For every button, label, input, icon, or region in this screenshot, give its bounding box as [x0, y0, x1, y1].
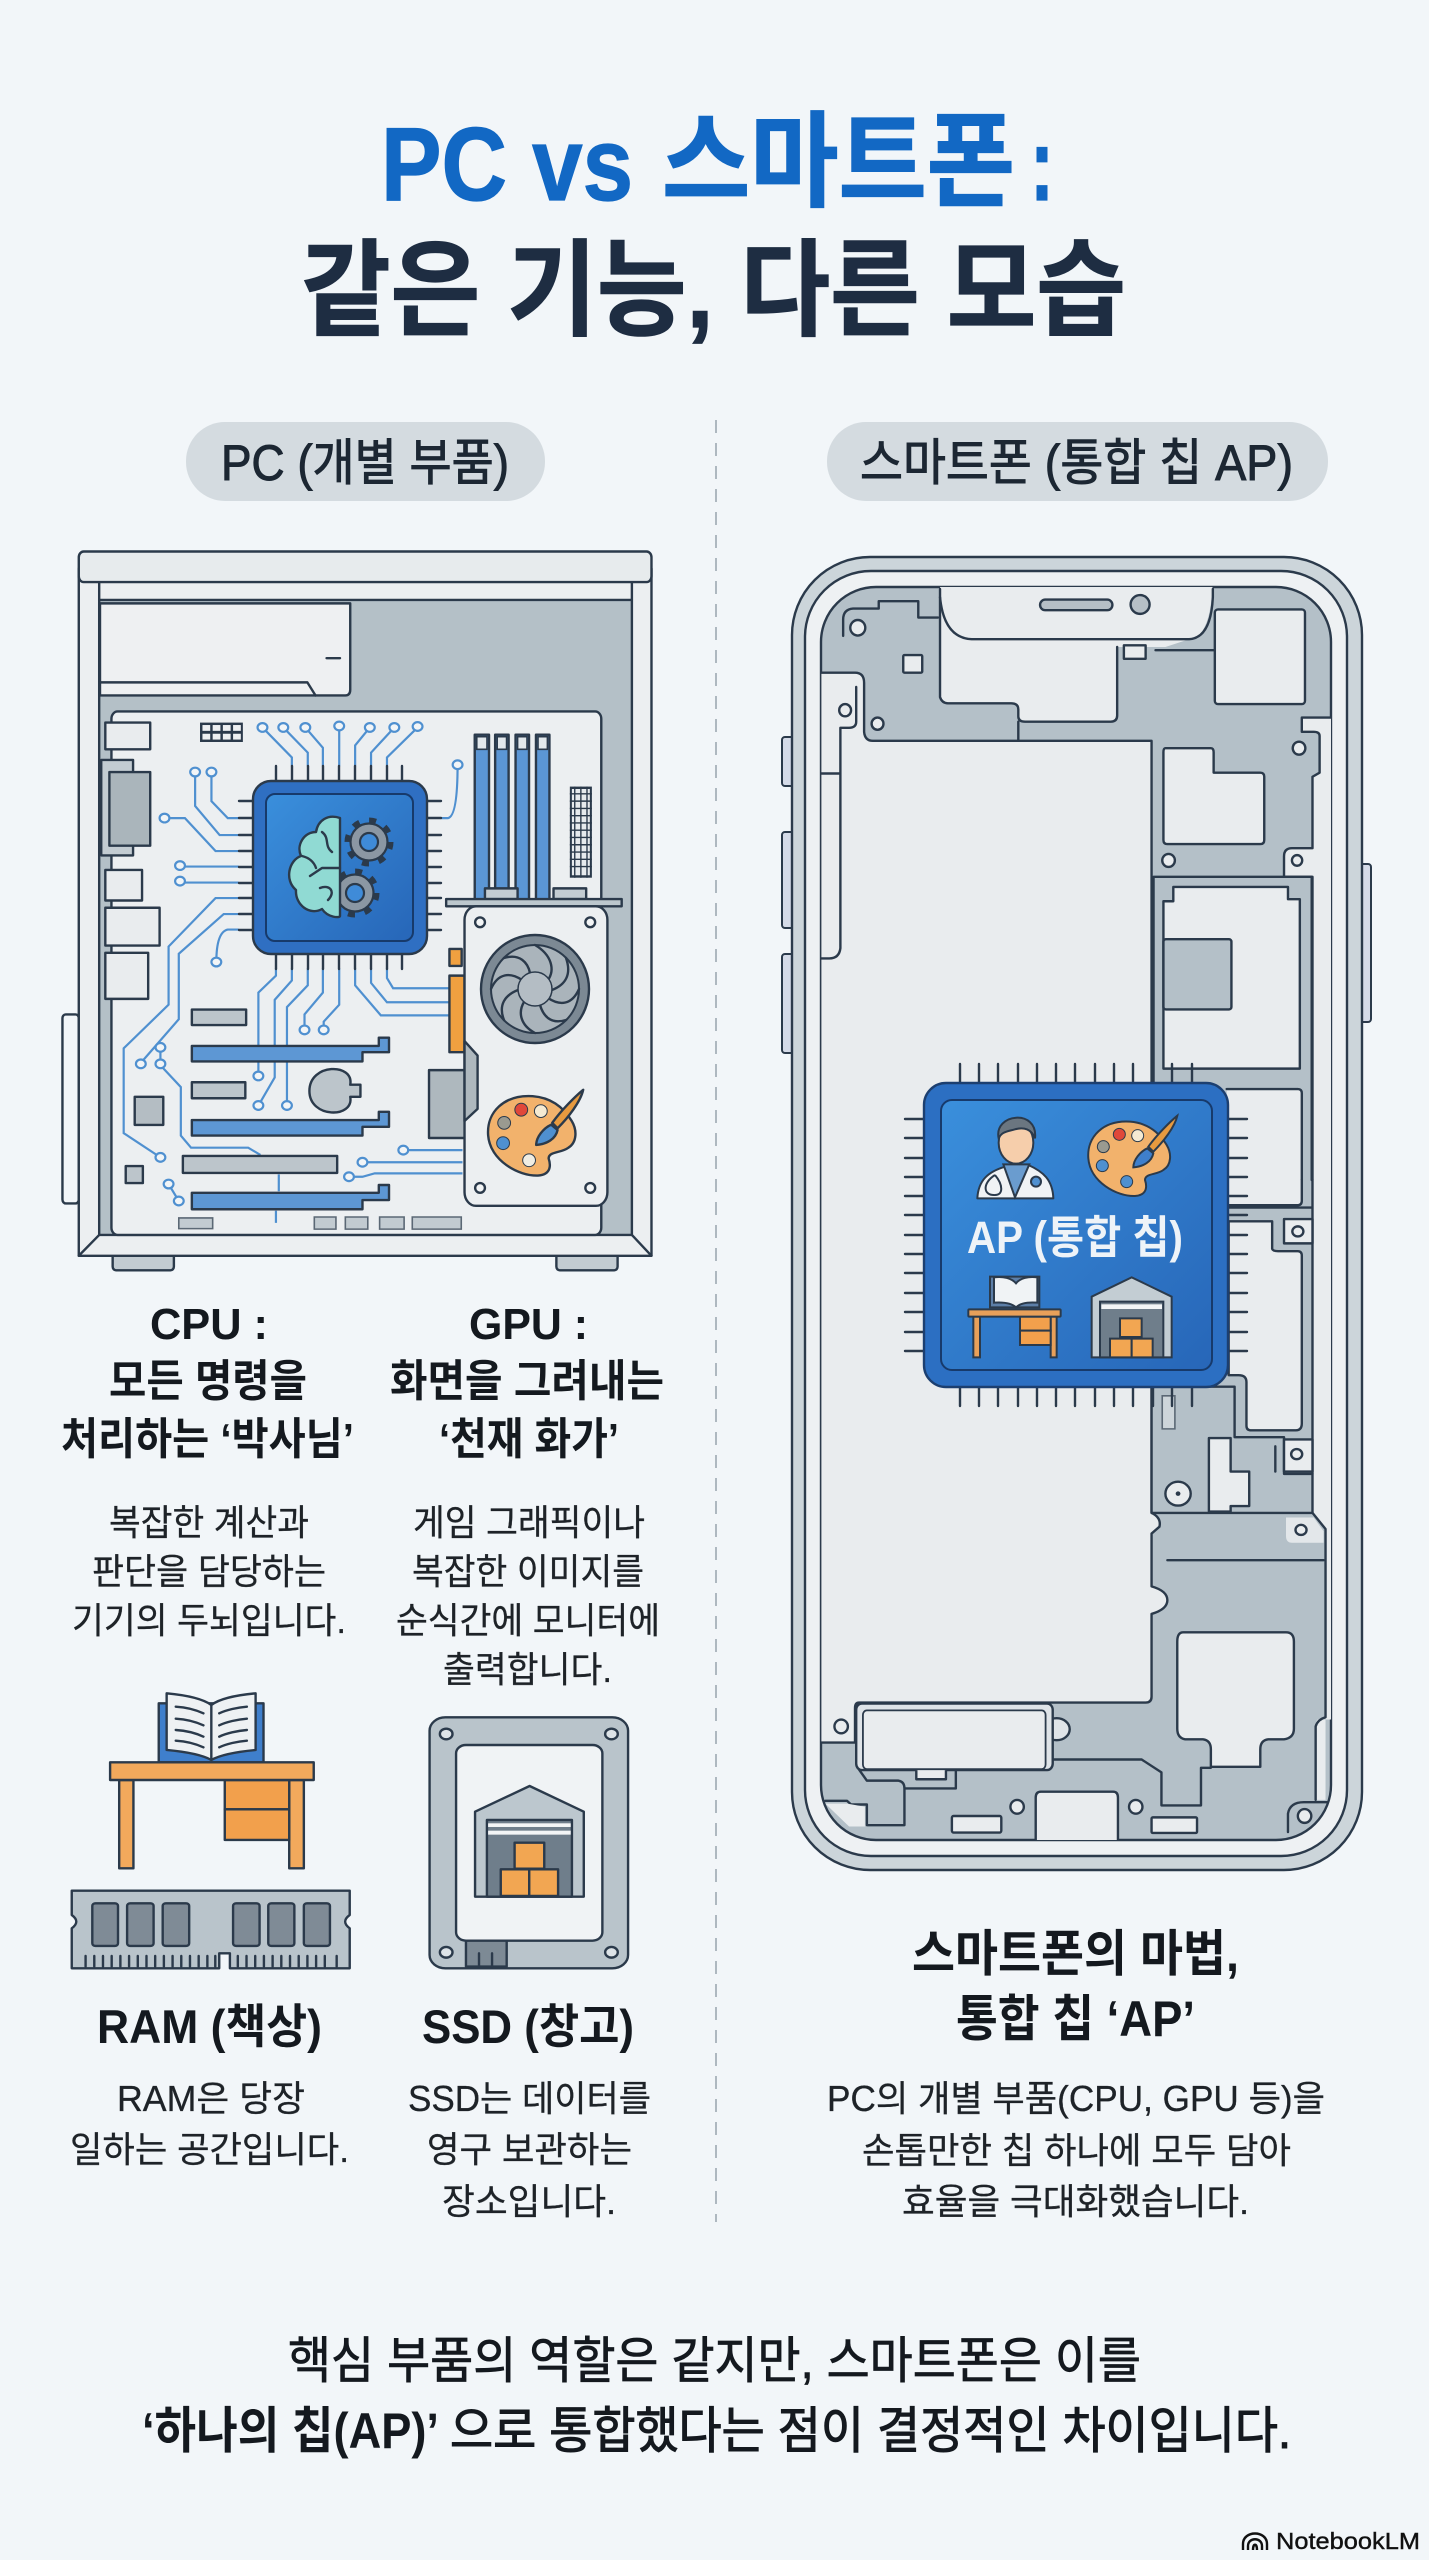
power supply: [100, 603, 350, 695]
CPU pins: [239, 766, 441, 969]
RAM sticks: [475, 735, 549, 900]
battery lower: [821, 1180, 1167, 1743]
RAM description: [70, 2000, 349, 2170]
icon: doctor: [977, 1118, 1053, 1198]
conclusion text: [142, 2333, 1291, 2459]
GPU description: 복잡한 이미지를: [412, 1551, 644, 1592]
title: PC vs: [381, 107, 633, 223]
RAM description: RAM (책상): [97, 2000, 322, 2053]
right frame and module: [1154, 877, 1312, 1180]
icon: desk and book: [968, 1277, 1061, 1357]
icon: warehouse: [1092, 1277, 1172, 1357]
AP heading and description: 스마트폰의 마법,: [912, 1926, 1239, 1982]
circuit traces: [124, 722, 462, 1223]
case feet: [113, 1252, 618, 1270]
NotebookLM watermark: NotebookLM: [1276, 2528, 1420, 2554]
SSD description: SSD (창고): [422, 2000, 634, 2053]
pill heading: PC: PC (개별 부품): [221, 435, 509, 491]
pill heading: smartphone: 스마트폰 (통합 칩 AP): [860, 435, 1293, 491]
speaker module: [856, 1703, 1070, 1779]
GPU description: 화면을 그려내는: [390, 1357, 664, 1406]
coin battery: [309, 1069, 360, 1112]
CPU description: [61, 1300, 354, 1641]
lower right lines and tag: [1167, 1513, 1326, 1800]
icon: desk: [110, 1762, 314, 1868]
title: [301, 105, 1126, 350]
case body: [79, 552, 651, 1256]
expansion slots: [183, 1010, 389, 1209]
GPU description: 게임 그래픽이나: [413, 1502, 645, 1543]
title: :: [1030, 107, 1054, 223]
icon: brain: [289, 817, 340, 917]
SSD description: SSD는 데이터를: [408, 2078, 651, 2119]
gray block under chip: [1152, 1387, 1312, 1513]
upper board: [821, 581, 1335, 1180]
GPU card: [446, 888, 622, 1206]
24-pin power connector: [570, 787, 592, 878]
AP chip: [924, 1083, 1228, 1387]
lower board: [821, 1180, 1335, 1841]
AP heading and description: 손톱만한 칩 하나에 모두 담아: [862, 2130, 1291, 2171]
case side handle: [62, 1014, 79, 1203]
CPU description: 기기의 두뇌입니다.: [72, 1600, 346, 1641]
conclusion text: 으로 통합했다는 점이 결정적인 차이입니다.: [450, 2403, 1291, 2459]
AP heading and description: 효율을 극대화했습니다.: [902, 2181, 1249, 2222]
icon: palette: [1088, 1116, 1177, 1196]
right upper modules: [1162, 718, 1335, 1180]
battery area and left strip: [821, 673, 1152, 1180]
CPU description: 모든 명령을: [109, 1357, 307, 1406]
GPU description: 순식간에 모니터에: [396, 1600, 660, 1641]
large lower module: [1177, 1632, 1294, 1767]
small header connector: [200, 723, 243, 742]
orange GPU connector: [449, 949, 465, 1052]
SSD description: 영구 보관하는: [427, 2129, 632, 2170]
right lower modules: [1227, 1180, 1312, 1474]
AP heading and description: 통합 칩 ‘AP’: [956, 1991, 1195, 2047]
small board chips: [126, 1097, 461, 1229]
right strip lower: [1314, 1180, 1331, 1800]
GPU description: GPU :: [469, 1300, 588, 1349]
AP chip pins: [905, 1064, 1247, 1406]
SSD description: 장소입니다.: [442, 2181, 616, 2222]
notch and top modules: [843, 581, 1305, 740]
GPU description: 출력합니다.: [443, 1649, 612, 1690]
conclusion text: 핵심 부품의 역할은 같지만, 스마트폰은 이를: [288, 2333, 1141, 2389]
gray chip under GPU: [429, 1070, 466, 1138]
CPU chip: [253, 781, 427, 954]
smartphone illustration: [782, 557, 1371, 1870]
icon: SSD with warehouse: [430, 1717, 628, 1968]
icon: book on desk: [159, 1693, 264, 1762]
AP heading and description: [827, 1926, 1325, 2222]
phone internals: [821, 581, 1335, 1841]
motherboard: [111, 711, 601, 1235]
pill heading: PC: [186, 422, 545, 501]
CPU description: 복잡한 계산과: [109, 1502, 309, 1543]
icon: gears: [335, 822, 389, 913]
icon: GPU palette: [488, 1090, 583, 1176]
title: 같은 기능, 다른 모습: [301, 233, 1126, 350]
CPU description: 판단을 담당하는: [92, 1551, 326, 1592]
GPU description: [390, 1300, 664, 1690]
rear IO ports: [101, 723, 160, 999]
bottom connectors and screws: [821, 1760, 1328, 1841]
icons: desk, RAM, SSD: [72, 1693, 628, 1968]
GPU cooling fan: [481, 935, 589, 1043]
GPU description: ‘천재 화가’: [439, 1415, 619, 1464]
phone side buttons: [782, 737, 1371, 1053]
RAM description: RAM은 당장: [117, 2078, 305, 2119]
screws left: [839, 620, 922, 730]
CPU description: 처리하는 ‘박사님’: [61, 1415, 354, 1464]
pill heading: smartphone: [827, 422, 1328, 501]
RAM description: 일하는 공간입니다.: [70, 2129, 349, 2170]
PC case illustration: [62, 552, 651, 1270]
icon: NotebookLM logo: [1243, 2534, 1267, 2550]
AP heading and description: PC의 개별 부품(CPU, GPU 등)을: [827, 2078, 1325, 2119]
icon: RAM module: [72, 1891, 350, 1968]
CPU description: CPU :: [150, 1300, 268, 1349]
phone shell: [792, 557, 1362, 1870]
SSD description: [408, 2000, 651, 2222]
AP chip label: AP (통합 칩): [967, 1212, 1183, 1263]
center dashed divider: [715, 420, 717, 2222]
title: 스마트폰: [662, 105, 1015, 221]
conclusion text: ‘하나의 칩(AP)’: [142, 2403, 439, 2459]
